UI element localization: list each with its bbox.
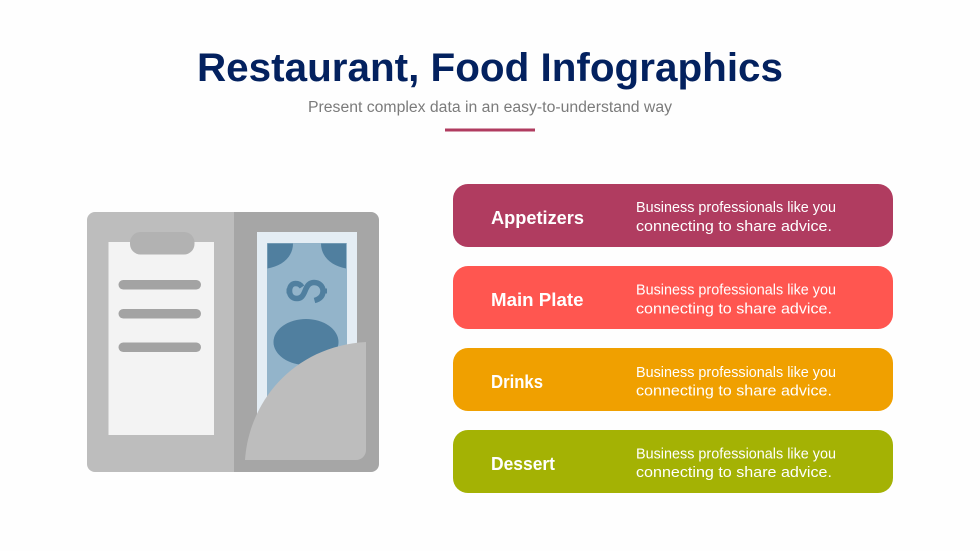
banknote corner right <box>321 244 346 268</box>
description: main plate: Business professionals like you <box>636 282 836 298</box>
paper clip <box>130 232 194 254</box>
label: main plate: Main Plate <box>491 289 584 310</box>
panel: dessert <box>453 430 893 493</box>
label: appetizers: Appetizers <box>491 207 584 228</box>
title: Restaurant, Food Infographics <box>197 46 783 90</box>
menu text lines <box>118 280 201 352</box>
panel: drinks <box>453 348 893 411</box>
banknote paper <box>257 232 357 447</box>
icon: menu with banknote <box>87 212 379 472</box>
description: dessert: connecting to share advice. <box>636 465 832 481</box>
description: appetizers: Business professionals like you <box>636 200 836 216</box>
banknote corner left <box>268 244 293 268</box>
description: appetizers: connecting to share advice. <box>636 219 832 235</box>
paper sheet <box>108 242 214 435</box>
banknote dollar sign <box>288 282 326 300</box>
accent underline <box>445 128 535 132</box>
panel: appetizers <box>453 184 893 247</box>
pocket flap <box>245 342 366 460</box>
banknote oval <box>274 319 338 365</box>
menu right cover <box>234 212 379 472</box>
menu left cover <box>87 212 234 472</box>
description: drinks: Business professionals like you <box>636 365 836 381</box>
subtitle: Present complex data in an easy-to-understand way <box>308 99 672 116</box>
description: main plate: connecting to share advice. <box>636 302 832 318</box>
label: dessert: Dessert <box>491 453 555 474</box>
description: dessert: Business professionals like you <box>636 446 836 462</box>
description: drinks: connecting to share advice. <box>636 384 832 400</box>
banknote face <box>267 243 347 433</box>
panel: main plate <box>453 266 893 329</box>
label: drinks: Drinks <box>491 371 543 392</box>
